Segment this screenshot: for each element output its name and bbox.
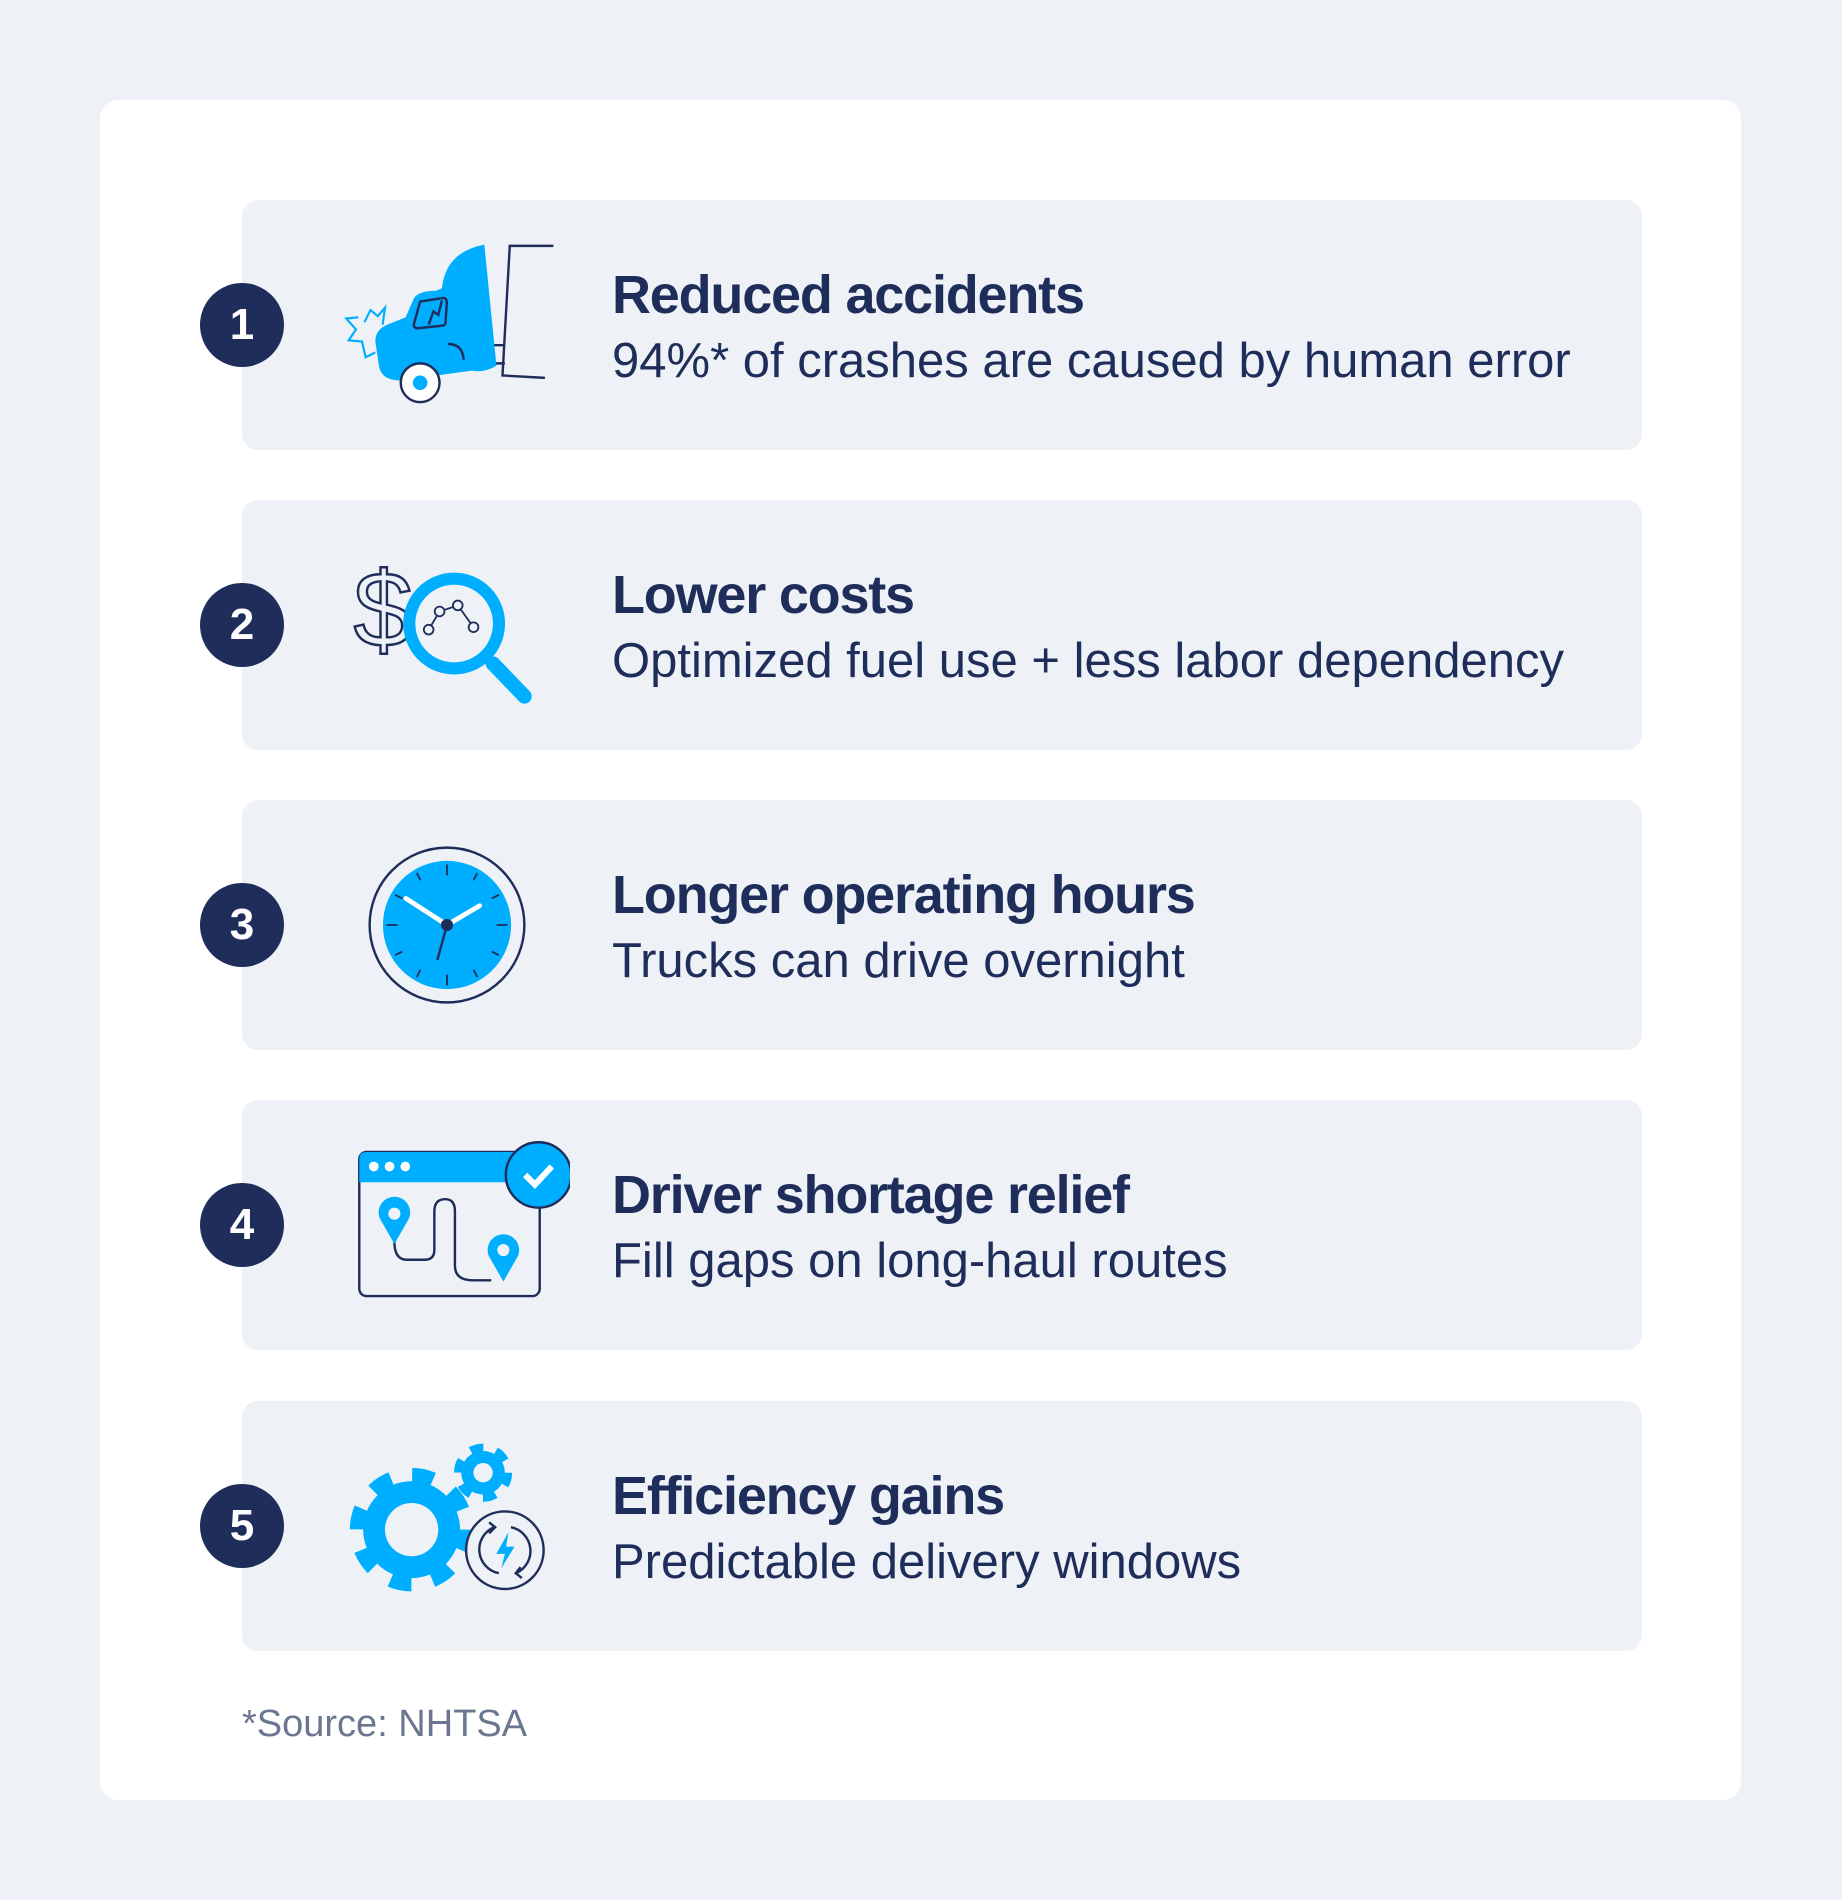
text: Driver shortage relief (612, 1165, 1129, 1225)
row 1: reduced accidents (242, 200, 1642, 450)
text (612, 865, 1195, 988)
text: Predictable delivery windows (612, 1535, 1241, 1589)
text: Fill gaps on long-haul routes (612, 1234, 1228, 1288)
text: Longer operating hours (612, 865, 1195, 925)
number 4 (200, 1183, 284, 1267)
number 3: 3 (230, 900, 254, 949)
icon: dollar magnifier: $ (353, 550, 413, 670)
icon: gears (350, 1444, 545, 1592)
row 3: longer hours (242, 800, 1642, 1050)
text: Lower costs (612, 565, 914, 625)
text: Efficiency gains (612, 1466, 1004, 1526)
text (612, 1466, 1241, 1589)
number 1 (200, 283, 284, 367)
row 2: lower costs (242, 500, 1642, 750)
number 2 (200, 583, 284, 667)
number 1: 1 (230, 300, 254, 349)
icon: dollar magnifier (353, 550, 532, 704)
text: 94%* of crashes are caused by human error (612, 334, 1571, 388)
icon: clock (368, 846, 526, 1004)
number 4: 4 (230, 1200, 254, 1249)
text (612, 1165, 1228, 1288)
text (612, 265, 1571, 388)
card (100, 100, 1741, 1800)
icon: route map (358, 1141, 570, 1298)
number 2: 2 (230, 600, 254, 649)
text: Reduced accidents (612, 265, 1084, 325)
row 4: driver shortage (242, 1100, 1642, 1350)
text (612, 565, 1564, 688)
text: Optimized fuel use + less labor dependency (612, 634, 1564, 688)
number 5: 5 (230, 1501, 254, 1550)
number 5 (200, 1484, 284, 1568)
text: Trucks can drive overnight (612, 934, 1185, 988)
row 5: efficiency (242, 1401, 1642, 1651)
icon: crashed truck (344, 244, 554, 404)
source note: *Source: NHTSA (242, 1703, 527, 1745)
number 3 (200, 883, 284, 967)
